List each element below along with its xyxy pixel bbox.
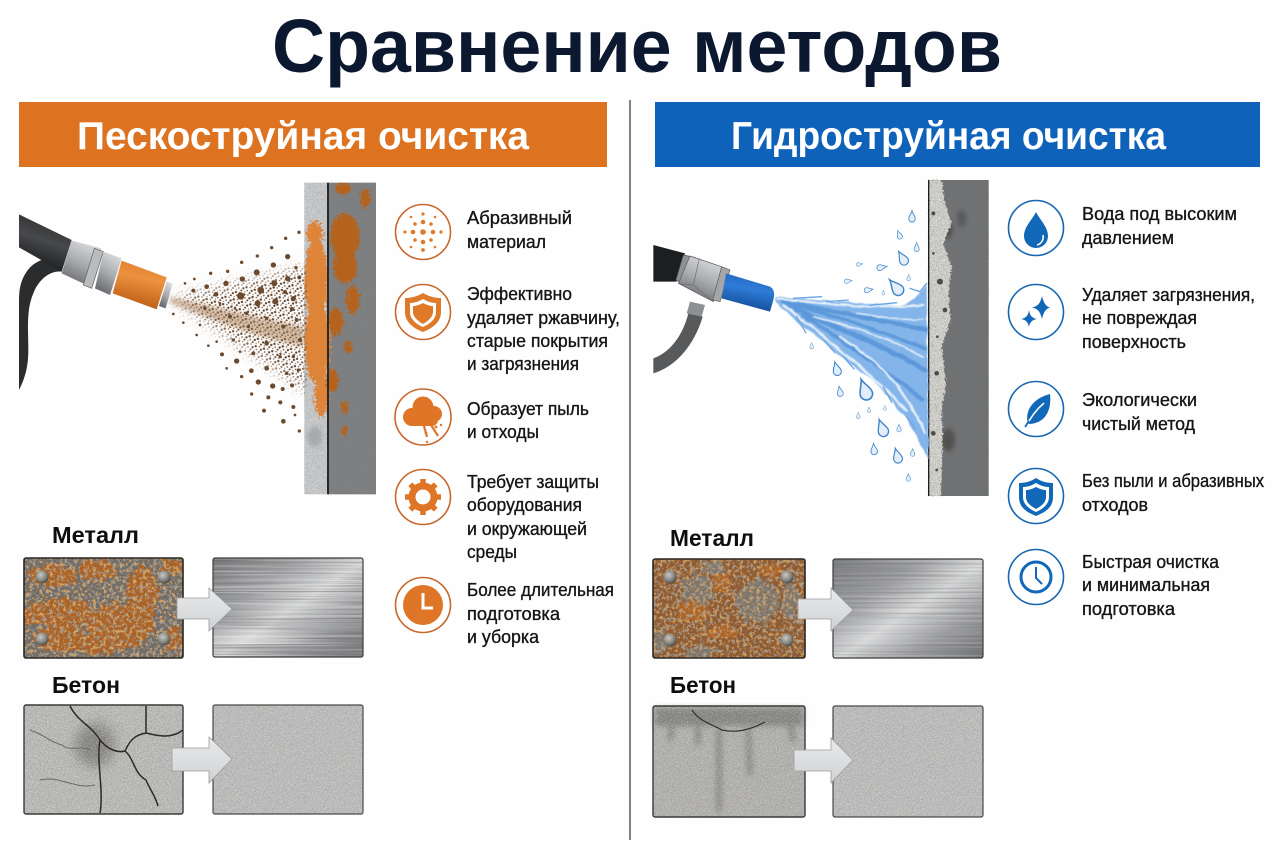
feature: no surface damage: не повреждая [1082, 307, 1197, 328]
feature: protection needed: оборудования [467, 494, 582, 515]
feature: protection needed: Требует защиты [467, 471, 599, 492]
heading: hydroblasting: Гидроструйная очистка [731, 115, 1166, 158]
hose [19, 214, 72, 390]
illustration: water nozzle spraying concrete wall [653, 180, 989, 496]
feature: eco-friendly [1008, 382, 1197, 436]
feature: fast cleaning: подготовка [1082, 598, 1176, 619]
concrete wall [928, 180, 989, 496]
before: cracked concrete [24, 705, 183, 814]
feature: high pressure water [1008, 200, 1237, 256]
feature: fast cleaning: и минимальная [1082, 574, 1210, 595]
feature: no surface damage: Удаляет загрязнения, [1082, 284, 1255, 305]
feature: removes rust: старые покрытия [467, 330, 608, 351]
before: rusty metal plate [653, 558, 805, 659]
feature: no dust: отходов [1082, 494, 1148, 515]
label: metal: Металл [670, 525, 754, 551]
illustration: sand nozzle spraying rusty wall [19, 182, 376, 494]
metal wall with rust [304, 182, 376, 494]
divider between methods [629, 100, 631, 840]
feature: longer preparation: и уборка [467, 626, 540, 647]
feature: protection needed [396, 470, 599, 562]
feature: high pressure water: Вода под высоким [1082, 203, 1237, 224]
feature: longer preparation: подготовка [467, 603, 561, 624]
feature: abrasive material: Абразивный [467, 207, 572, 228]
arrow: metal result [177, 588, 232, 631]
feature: dust and waste: Образует пыль [467, 398, 589, 419]
feature: removes rust [396, 283, 620, 374]
feature: no surface damage [1008, 284, 1255, 352]
heading: sandblasting [19, 102, 607, 167]
feature: protection needed: среды [467, 541, 517, 562]
title: Сравнение методов [272, 4, 1002, 88]
before: stained concrete [653, 706, 805, 817]
label: metal: Металл [52, 522, 139, 548]
feature: eco-friendly: Экологически [1082, 389, 1197, 410]
feature: no dust: Без пыли и абразивных [1082, 470, 1265, 491]
after: clean metal plate [213, 558, 363, 657]
label: concrete: Бетон [52, 672, 120, 698]
feature: dust and waste: и отходы [467, 421, 539, 442]
arrow: concrete result [794, 738, 853, 783]
feature: dust and waste [395, 389, 589, 445]
feature: fast cleaning [1008, 550, 1220, 619]
heading: hydroblasting [655, 102, 1260, 167]
feature: longer preparation: Более длительная [467, 579, 614, 600]
feature: removes rust: и загрязнения [467, 353, 579, 374]
water jet [775, 283, 929, 460]
hose [653, 245, 703, 373]
feature: high pressure water: давлением [1082, 227, 1174, 248]
feature list: hydroblasting [1008, 200, 1265, 619]
nozzle [676, 255, 774, 317]
water droplets [810, 211, 919, 481]
panel: hydroblasting [653, 102, 1265, 817]
nozzle [62, 241, 173, 309]
heading: sandblasting: Пескоструйная очистка [77, 115, 529, 158]
feature: removes rust: Эффективно [467, 283, 572, 304]
after: clean concrete [833, 706, 983, 817]
feature: removes rust: удаляет ржавчину, [467, 307, 620, 328]
feature: abrasive material: материал [467, 231, 546, 252]
label: concrete: Бетон [670, 672, 736, 698]
before: rusty metal plate [22, 558, 183, 658]
arrow: concrete result [172, 737, 232, 783]
after: clean concrete [213, 705, 363, 814]
feature: longer preparation [396, 578, 614, 647]
arrow: metal result [798, 588, 853, 631]
abrasive spray [168, 230, 307, 433]
feature: fast cleaning: Быстрая очистка [1082, 551, 1220, 572]
feature: no surface damage: поверхность [1082, 331, 1186, 352]
after: clean metal plate [833, 559, 983, 658]
feature: eco-friendly: чистый метод [1082, 413, 1195, 434]
panel: sandblasting [19, 102, 620, 814]
feature: no dust [1008, 468, 1265, 524]
feature: protection needed: и окружающей [467, 518, 587, 539]
feature list: sandblasting [395, 204, 620, 647]
feature: abrasive material [396, 204, 572, 260]
